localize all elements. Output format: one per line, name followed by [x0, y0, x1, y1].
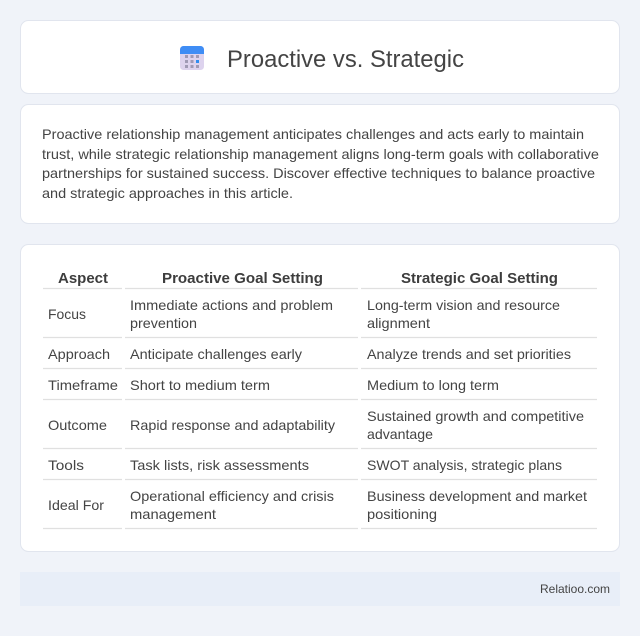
- table row: Outcome: Sustained growth and competitive: [367, 408, 584, 424]
- table row: Timeframe: Medium to long term: [367, 377, 499, 393]
- panel: comparison table: [20, 244, 620, 552]
- table row: Ideal For: [48, 488, 587, 522]
- icon: calendar: [180, 46, 204, 70]
- table row: Approach: Approach: [48, 346, 110, 362]
- table row: Timeframe: [48, 377, 499, 393]
- table row: Outcome: [48, 408, 584, 442]
- footer credit: Relatioo.com: [540, 582, 610, 596]
- panel: title card: [20, 20, 620, 94]
- panel: introduction: [20, 104, 620, 224]
- table row: Ideal For: positioning: [367, 506, 437, 522]
- table row: Focus: [48, 297, 560, 331]
- table row: Outcome: advantage: [367, 426, 433, 442]
- table row: Focus: Immediate actions and problem: [130, 297, 333, 313]
- table row: Approach: Anticipate challenges early: [130, 346, 302, 362]
- table row: Tools: Tools: [48, 457, 84, 473]
- table row: Approach: Analyze trends and set priorities: [367, 346, 571, 362]
- table row: Ideal For: management: [130, 506, 216, 522]
- table row: Focus: Long-term vision and resource: [367, 297, 560, 313]
- table row: Outcome: Rapid response and adaptability: [130, 417, 335, 433]
- table row: Tools: Task lists, risk assessments: [130, 457, 309, 473]
- table row: Ideal For: Operational efficiency and crisis: [130, 488, 334, 504]
- table header: Strategic Goal Setting: [401, 270, 558, 287]
- footer: [20, 572, 620, 606]
- table row: Tools: [48, 457, 562, 473]
- text block: introduction paragraph: partnerships for sustained success. Discover effective techniques to balance proactive: [42, 165, 595, 181]
- table header: Aspect: [58, 270, 108, 287]
- table row: Outcome: Outcome: [48, 417, 107, 433]
- table row: Ideal For: Business development and market: [367, 488, 587, 504]
- text block: introduction paragraph: trust, while strategic relationship management aligns long-term goals with collaborative: [42, 146, 599, 162]
- title: Proactive vs. Strategic: [227, 46, 464, 73]
- table row: Focus: alignment: [367, 315, 430, 331]
- table header: [58, 270, 558, 287]
- table row: Approach: [48, 346, 571, 362]
- table row: Tools: SWOT analysis, strategic plans: [367, 457, 562, 473]
- table row: Timeframe: Timeframe: [48, 377, 118, 393]
- table row: Focus: Focus: [48, 306, 86, 322]
- table header: Proactive Goal Setting: [162, 270, 323, 287]
- table row: Focus: prevention: [130, 315, 197, 331]
- text block: introduction paragraph: and strategic approaches in this article.: [42, 185, 293, 201]
- text block: introduction paragraph: [42, 126, 599, 201]
- table row: Timeframe: Short to medium term: [130, 377, 270, 393]
- table row: Ideal For: Ideal For: [48, 497, 104, 513]
- text block: introduction paragraph: Proactive relationship management anticipates challenges and acts early to maintain: [42, 126, 584, 142]
